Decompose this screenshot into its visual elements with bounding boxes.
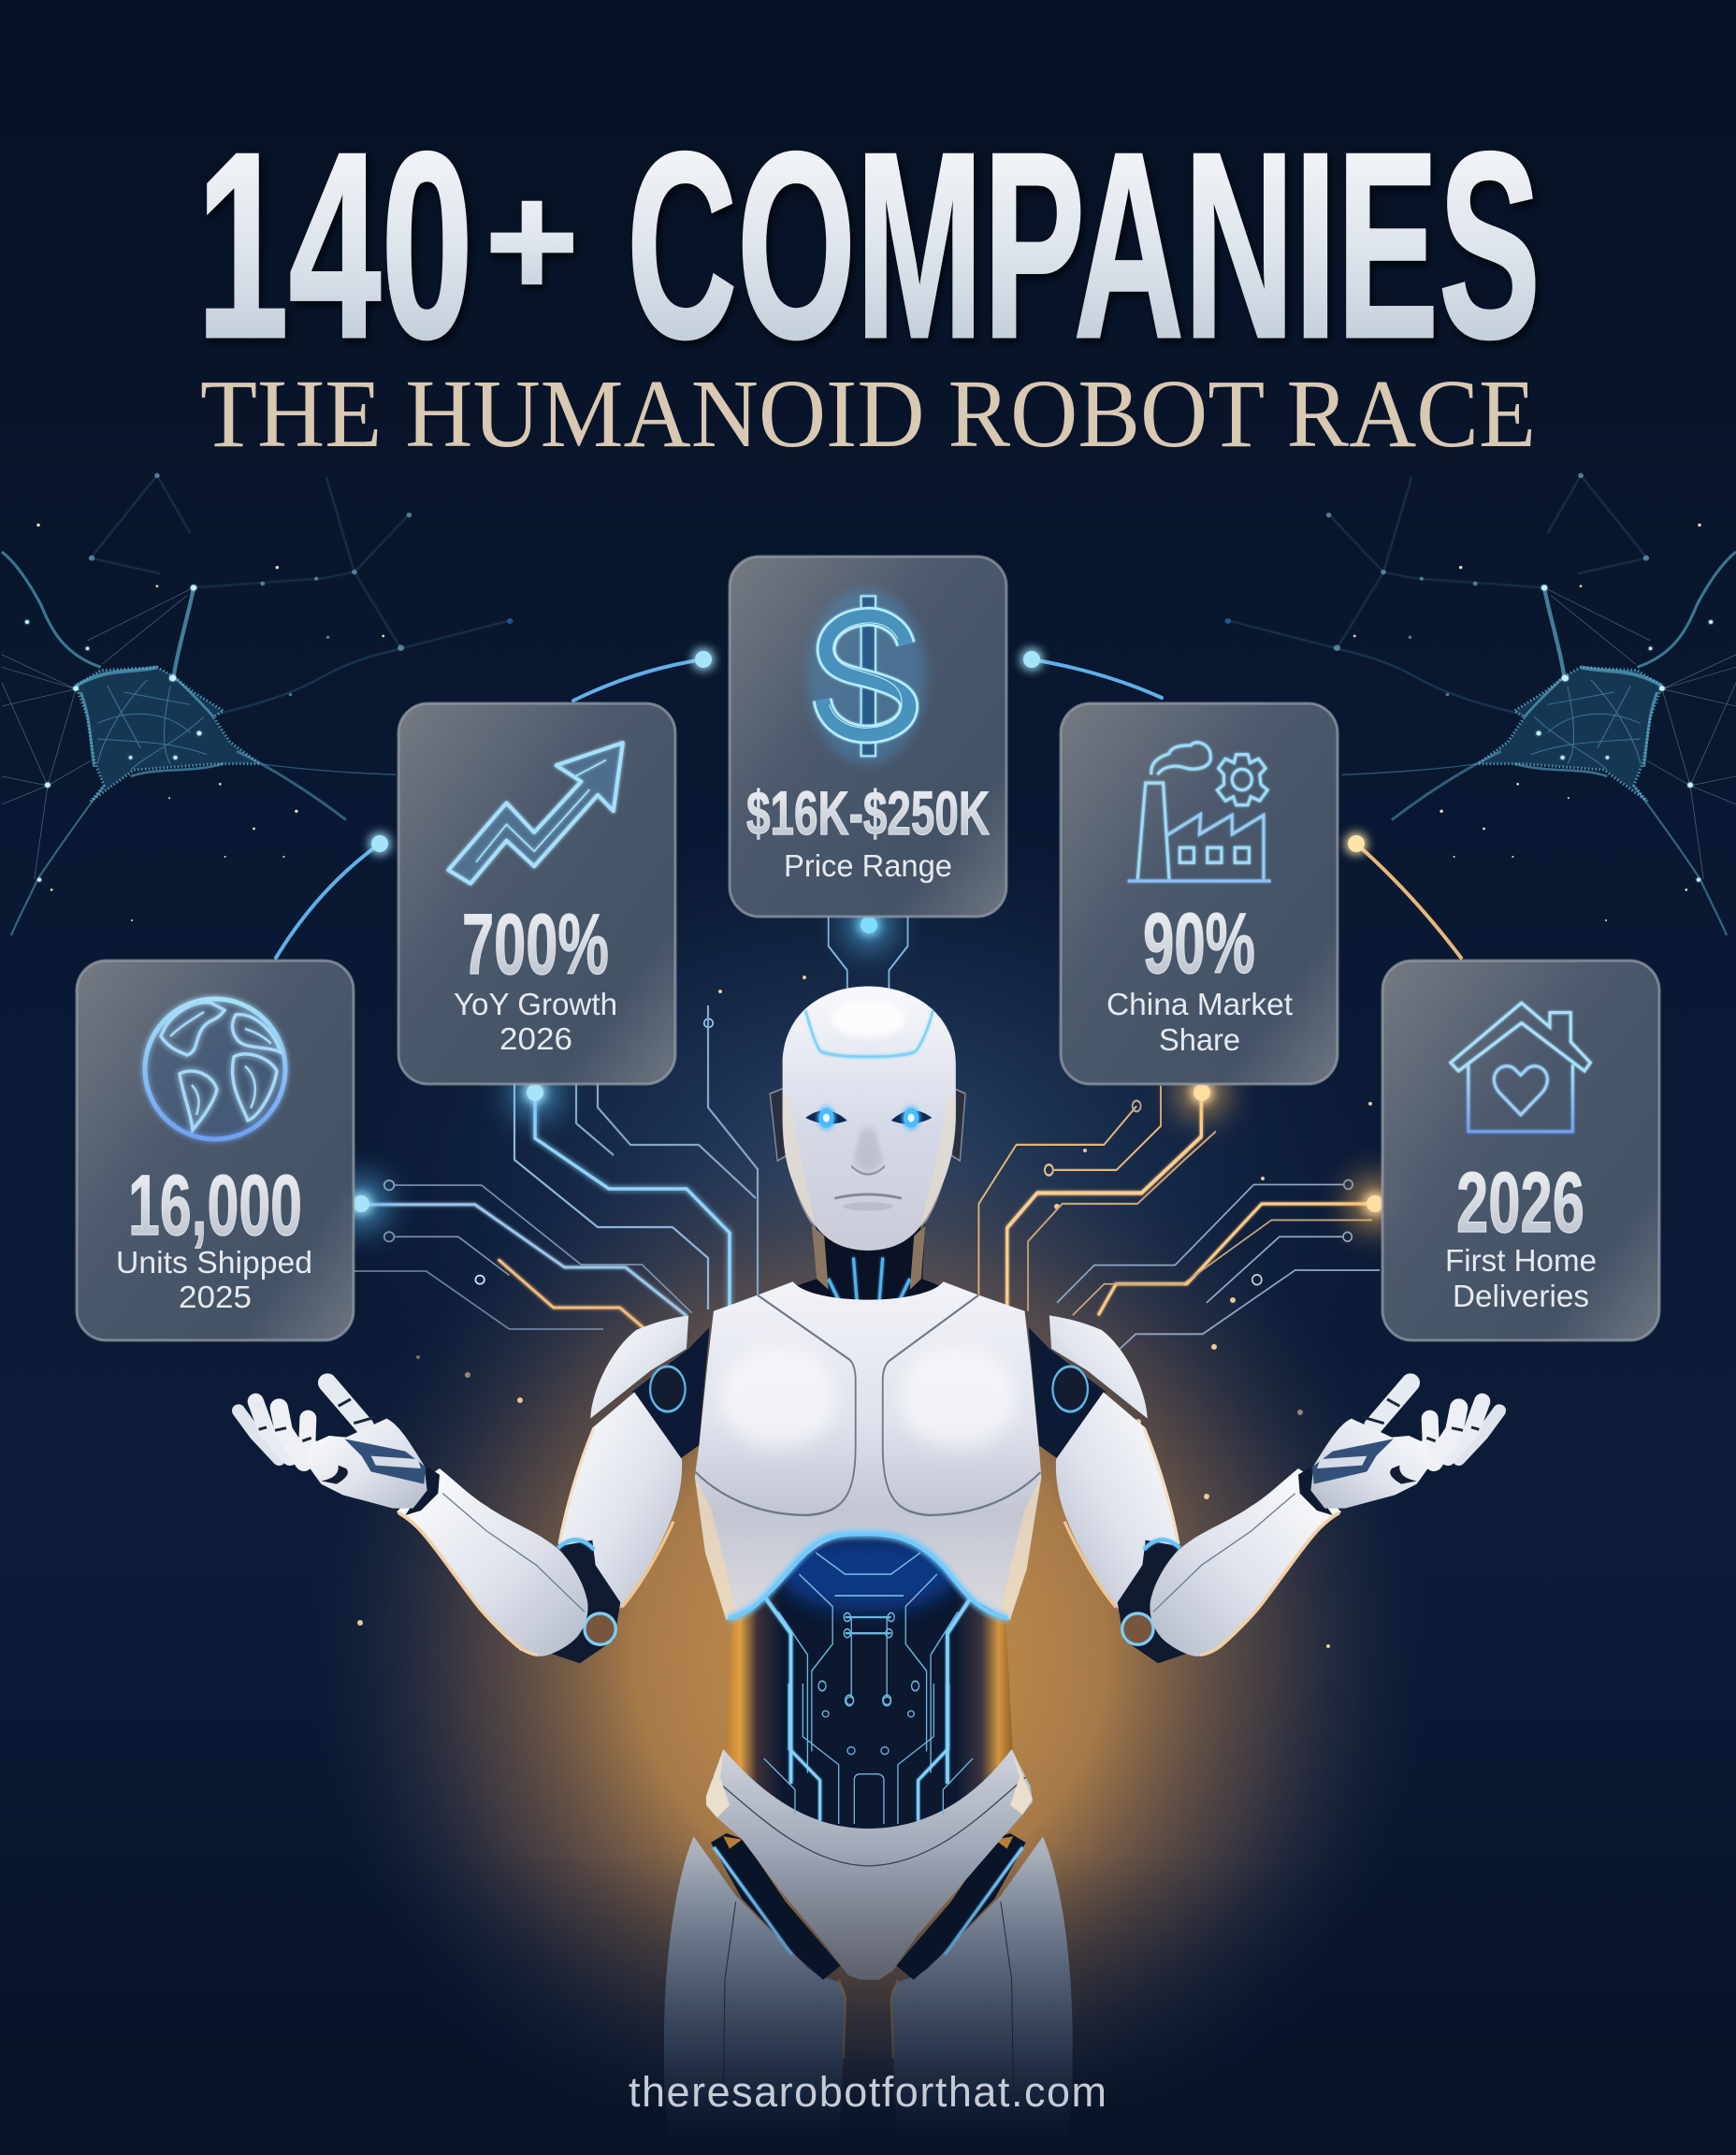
robot: pelvis	[706, 1749, 1033, 1980]
robot: left hand	[239, 1382, 427, 1509]
robot: waist circuitry lower	[764, 1684, 973, 1824]
icon: globe	[145, 999, 285, 1139]
footer url: theresarobotforthat.com	[629, 2068, 1107, 2116]
label: units shipped 2025: Units Shipped	[116, 1245, 312, 1280]
stat: 16,000: 16,000	[128, 1158, 302, 1253]
label: first home deliveries	[1445, 1243, 1597, 1313]
label: first home deliveries: Deliveries	[1453, 1279, 1589, 1313]
robot: hip joints	[711, 1833, 1026, 1980]
label: yoy growth 2026: YoY Growth	[454, 987, 617, 1021]
neural network: right	[1225, 473, 1736, 935]
arc connectors	[276, 659, 1461, 958]
icon: rising arrow	[448, 743, 623, 884]
label: first home deliveries: First Home	[1445, 1243, 1597, 1278]
robot: head	[770, 987, 965, 1251]
card: price range	[730, 557, 1006, 917]
robot: neck	[793, 1220, 943, 1314]
neural network: left	[2, 473, 513, 935]
card: units shipped	[77, 961, 354, 1340]
subtitle: THE HUMANOID ROBOT RACE	[200, 360, 1536, 468]
label: yoy growth 2026: 2026	[499, 1021, 572, 1056]
robot: left shoulder and upper arm	[590, 1315, 709, 1459]
stat: 2026: 2026	[1456, 1155, 1584, 1251]
robot: eyes	[805, 1108, 932, 1127]
label: units shipped 2025: 2025	[179, 1280, 252, 1314]
circuit traces: left	[354, 1019, 713, 1329]
robot	[239, 987, 1499, 2154]
stat: 700%: 700%	[462, 897, 609, 992]
label: china market share	[1107, 987, 1293, 1057]
connector: card to head	[829, 914, 1216, 1317]
label: yoy growth 2026	[454, 987, 617, 1056]
robot: waist circuitry upper	[766, 1537, 970, 1784]
card: first home deliveries	[1382, 961, 1659, 1340]
title: +	[485, 152, 578, 330]
card: yoy growth	[398, 703, 675, 1084]
icon: house with heart	[1451, 1003, 1590, 1132]
background stars	[357, 976, 1372, 1651]
title	[196, 97, 1541, 393]
icon: dollar sign	[807, 589, 926, 764]
robot: legs	[664, 1833, 1073, 2154]
robot: waist circuit panel	[726, 1534, 1013, 1833]
robot: torso	[695, 1281, 1041, 1620]
robot: left arm	[239, 1315, 709, 1663]
robot: left elbow	[552, 1540, 620, 1663]
label: units shipped 2025	[116, 1245, 312, 1314]
label: price range: Price Range	[784, 848, 952, 883]
stat: 90%: 90%	[1143, 896, 1255, 991]
title: 140	[196, 97, 473, 393]
icon: factory and gear	[1128, 743, 1271, 881]
robot: waist glow arch	[729, 1534, 1008, 1618]
card: china market share	[1061, 703, 1338, 1084]
label: china market share: China Market	[1107, 987, 1293, 1021]
robot: right arm	[1029, 1315, 1499, 1663]
connector node halos	[337, 903, 1399, 1228]
connector nodes	[353, 917, 1383, 1212]
label: china market share: Share	[1159, 1022, 1240, 1057]
robot: left forearm	[397, 1468, 588, 1656]
bottom fade	[0, 1852, 1736, 2155]
circuit traces: right	[1057, 1180, 1380, 1349]
circuit traces: from growth card	[514, 1005, 758, 1309]
stat: price range value: $16K-$250K	[746, 778, 990, 847]
arc connector end dots	[371, 651, 1365, 852]
